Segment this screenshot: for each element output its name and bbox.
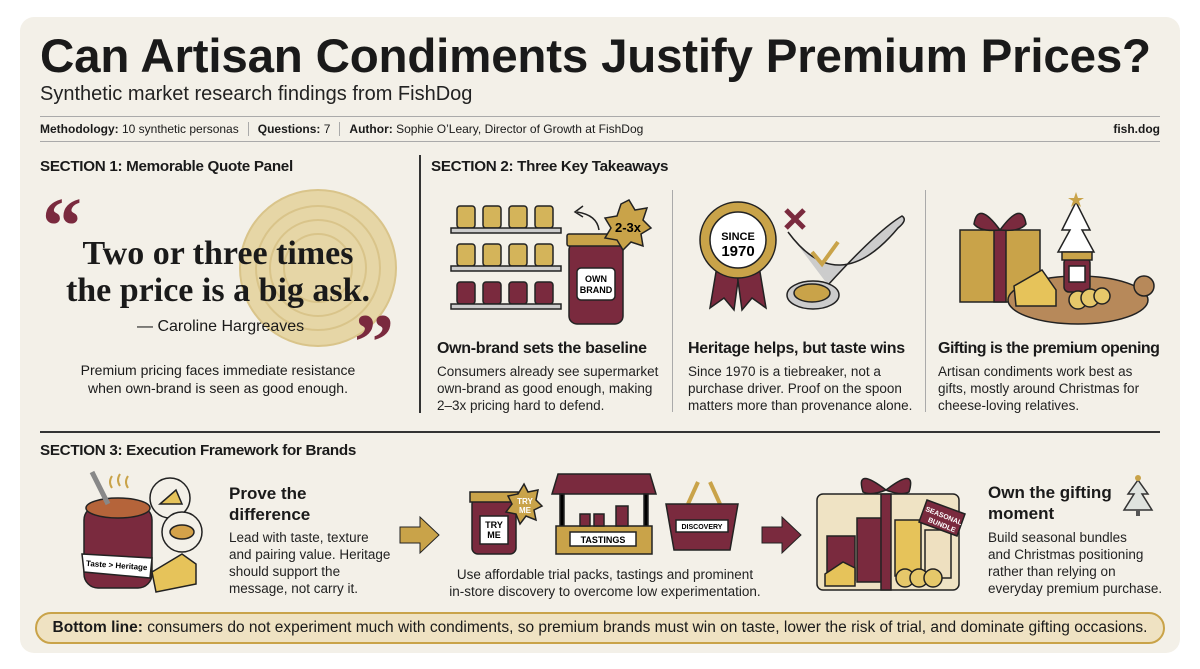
body: and Christmas positioning [988, 547, 1143, 562]
body: Artisan condiments work best as [938, 364, 1132, 379]
heading: Gifting is the premium opening [938, 340, 1159, 357]
icon: shelves and own brand jar: OWN [585, 274, 607, 284]
icon: try me jar, tastings stall, discovery basket: ME [487, 530, 501, 540]
heading: Own the gifting [988, 483, 1112, 502]
gift bundle icon: SEASONAL [924, 506, 964, 527]
body [449, 567, 761, 599]
quote text: Two or three times [82, 235, 354, 272]
attribution: — Caroline Hargreaves [137, 318, 304, 335]
icon: shelves and own brand jar [450, 199, 652, 325]
body: 2–3x pricing hard to defend. [437, 398, 604, 413]
quote description: Premium pricing faces immediate resistance [81, 362, 355, 378]
body [938, 364, 1139, 413]
takeaway 3 [938, 192, 1159, 413]
body: Use affordable trial packs, tastings and prominent [457, 567, 753, 582]
heading: Prove the [229, 484, 306, 503]
subtitle: Synthetic market research findings from FishDog [40, 83, 472, 105]
decorative circle [239, 189, 397, 347]
icon: try me jar, tastings stall, discovery basket: ME [519, 506, 532, 515]
quote text: the price is a big ask. [66, 272, 370, 309]
icon: shelves and own brand jar: 2-3x [615, 220, 642, 235]
icon: rosette and spoon [699, 201, 905, 312]
close quote mark: ” [354, 299, 394, 387]
step 1 [81, 471, 390, 596]
body: purchase driver. Proof on the spoon [688, 381, 902, 396]
body: own-brand as good enough, making [437, 381, 652, 396]
body: Build seasonal bundles [988, 530, 1127, 545]
icon: rosette and spoon: SINCE [721, 231, 755, 243]
meta row: fish.dog [1113, 122, 1160, 136]
heading [229, 484, 310, 524]
icon: shelves and own brand jar: BRAND [580, 285, 613, 295]
gift bundle icon: BUNDLE [927, 517, 957, 534]
takeaway 1 [437, 199, 658, 413]
icon: try me jar, tastings stall, discovery basket: TRY [517, 497, 534, 506]
quote text [66, 235, 370, 309]
quote panel [42, 183, 397, 396]
meta row: Methodology: 10 synthetic personas Questions: 7 Author: Sophie O’Leary, Director of Growth at FishDog [40, 122, 643, 136]
heading: Own-brand sets the baseline [437, 340, 647, 357]
icon: gift, tree, cheese board [959, 192, 1155, 325]
section 1 heading: SECTION 1: Memorable Quote Panel [40, 158, 293, 175]
body: in-store discovery to overcome low experimentation. [449, 584, 761, 599]
arrow 2 [762, 516, 802, 554]
heading: difference [229, 505, 310, 524]
section 2 heading: SECTION 2: Three Key Takeaways [431, 158, 668, 175]
body: Lead with taste, texture [229, 530, 369, 545]
step 3 [988, 475, 1162, 596]
quote description [81, 362, 355, 396]
bottom line callout [35, 612, 1165, 644]
gift bundle icon [816, 478, 966, 591]
body: gifts, mostly around Christmas for [938, 381, 1139, 396]
body: rather than relying on [988, 564, 1116, 579]
body: matters more than provenance alone. [688, 398, 912, 413]
takeaway 2 [688, 201, 912, 413]
arrow 1 [400, 516, 440, 554]
icon: jar with cheese and bread: Taste > Heritage [86, 559, 148, 572]
body: should support the [229, 564, 340, 579]
quote description: when own-brand is seen as good enough. [88, 380, 348, 396]
icon: try me jar, tastings stall, discovery basket: TASTINGS [581, 535, 625, 545]
body: Consumers already see supermarket [437, 364, 658, 379]
icon: try me jar, tastings stall, discovery basket [469, 473, 739, 555]
heading [988, 483, 1112, 523]
heading: Heritage helps, but taste wins [688, 340, 905, 357]
body [688, 364, 912, 413]
icon: try me jar, tastings stall, discovery basket: DISCOVERY [682, 524, 723, 531]
body [229, 530, 390, 596]
body: message, not carry it. [229, 581, 358, 596]
icon: tree [1122, 475, 1154, 516]
body: Since 1970 is a tiebreaker, not a [688, 364, 881, 379]
body [988, 530, 1162, 596]
icon: rosette and spoon: 1970 [721, 243, 755, 260]
icon: try me jar, tastings stall, discovery basket: TRY [485, 520, 503, 530]
heading: moment [988, 504, 1054, 523]
open quote mark: “ [42, 183, 82, 271]
body: cheese-loving relatives. [938, 398, 1079, 413]
bottom line callout: Bottom line: consumers do not experiment much with condiments, so premium brands must win on taste, lower the risk of trial, and dominate gifting occasions. [53, 619, 1147, 636]
section 3 heading: SECTION 3: Execution Framework for Brands [40, 442, 356, 459]
title: Can Artisan Condiments Justify Premium Prices? [40, 30, 1151, 83]
body: everyday premium purchase. [988, 581, 1162, 596]
meta row [40, 116, 1160, 142]
body [437, 364, 658, 413]
body: and pairing value. Heritage [229, 547, 390, 562]
icon: jar with cheese and bread [81, 471, 203, 593]
step 2 [449, 473, 761, 599]
